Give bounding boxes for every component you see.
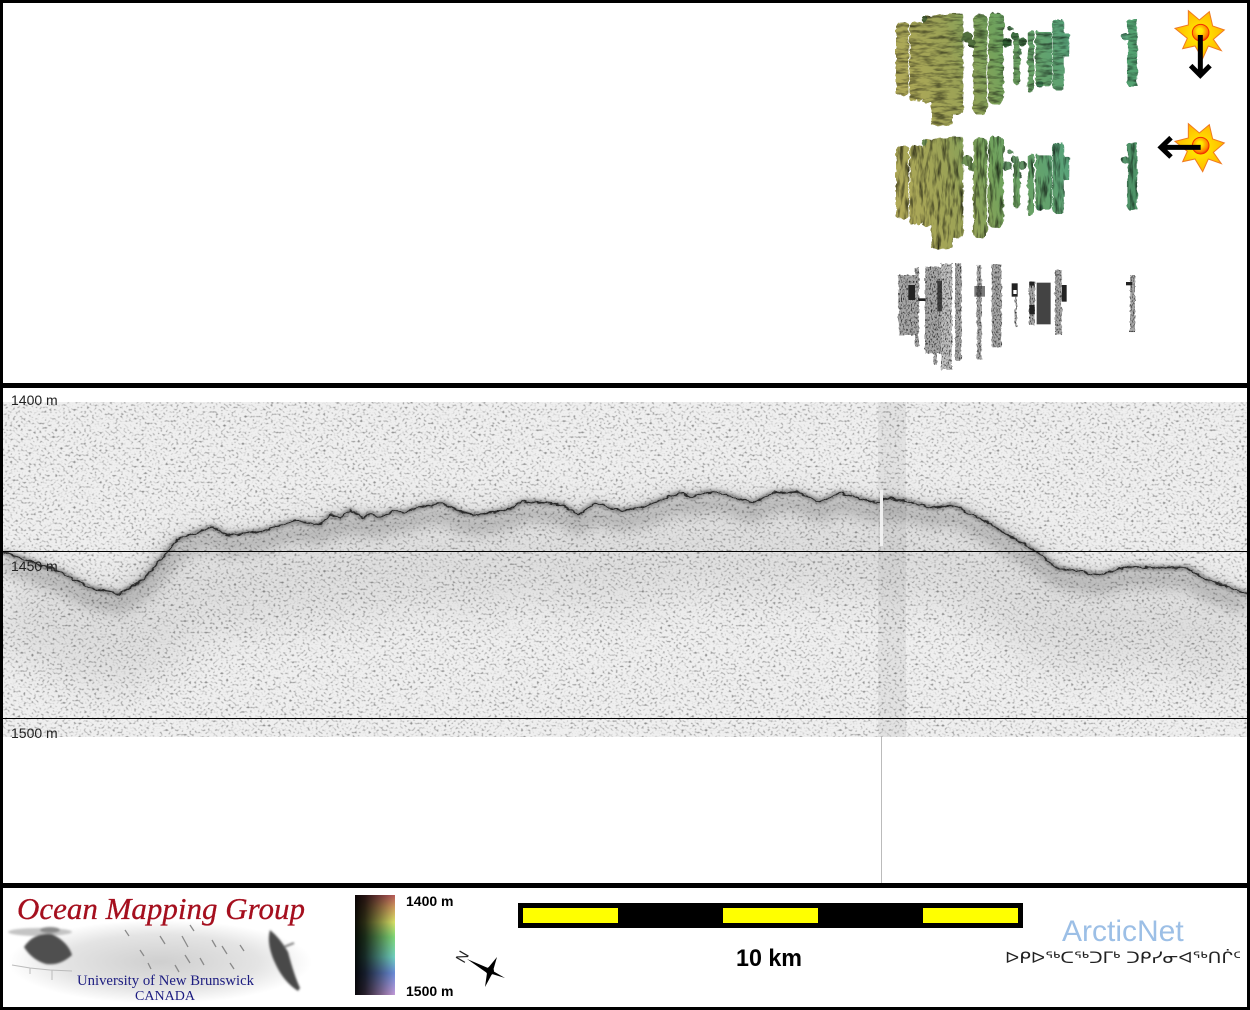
seabed reflector line bbox=[3, 492, 1248, 594]
logo subtitle: university: University of New Brunswick bbox=[77, 973, 254, 989]
panel: sonar sub-bottom profile bbox=[3, 392, 1248, 883]
panel: relief swath maps bbox=[896, 11, 1224, 370]
bright vertical artefact bbox=[880, 490, 883, 546]
compass north letter: N bbox=[453, 948, 473, 966]
legend label bottom: 1500 m bbox=[406, 983, 453, 999]
logo subtitle: country: CANADA bbox=[135, 989, 196, 1004]
depth label 1500 m: 1500 m bbox=[11, 725, 58, 741]
legend colour ramp bbox=[355, 895, 395, 995]
logo: ArcticNet in Inuktitut syllabics: ᐅᑭᐅᖅᑕᖅᑐᒥᒃ ᑐᑭᓯᓂᐊᖅᑎᒌᑦ bbox=[1005, 949, 1241, 967]
depth line 1450 m bbox=[3, 551, 1248, 552]
thin vertical trace below profile bbox=[881, 737, 882, 883]
icon: sun illumination from north with arrow bbox=[1175, 11, 1224, 75]
logo backdrop bbox=[8, 920, 312, 1004]
icon: sun illumination from east with arrow bbox=[1161, 124, 1224, 172]
depth line 1500 m bbox=[3, 718, 1248, 719]
swath map: sun from north bbox=[896, 13, 1137, 125]
logo: seabed scour marks bbox=[125, 925, 244, 972]
depth label 1450 m: 1450 m bbox=[11, 558, 58, 574]
swath map: backscatter greyscale bbox=[898, 263, 1135, 370]
swath map: sun from east bbox=[896, 136, 1137, 249]
sub-seabed shadow bbox=[3, 502, 1248, 644]
logo: ship sonar shadow bbox=[269, 930, 300, 991]
swath map: backscatter dark patches bbox=[908, 281, 1132, 324]
icon: north compass star bbox=[453, 948, 505, 987]
scale bar bbox=[518, 903, 1023, 928]
logo: seabed fringe bbox=[12, 965, 72, 980]
colour depth legend bbox=[355, 893, 453, 999]
scale bar label: 10 km bbox=[736, 945, 802, 972]
logo: ArcticNet: ArcticNet bbox=[1062, 915, 1184, 948]
vertical noise band bbox=[878, 402, 906, 737]
logo: Ocean Mapping Group bbox=[8, 891, 312, 1004]
legend label top: 1400 m bbox=[406, 893, 453, 909]
panel: footer bbox=[8, 891, 1241, 1004]
sonar speckle background bbox=[3, 402, 1248, 737]
logo title: Ocean Mapping Group bbox=[17, 891, 305, 926]
depth label 1400 m: 1400 m bbox=[11, 392, 58, 408]
logo: scallop sonar image bbox=[8, 927, 72, 964]
